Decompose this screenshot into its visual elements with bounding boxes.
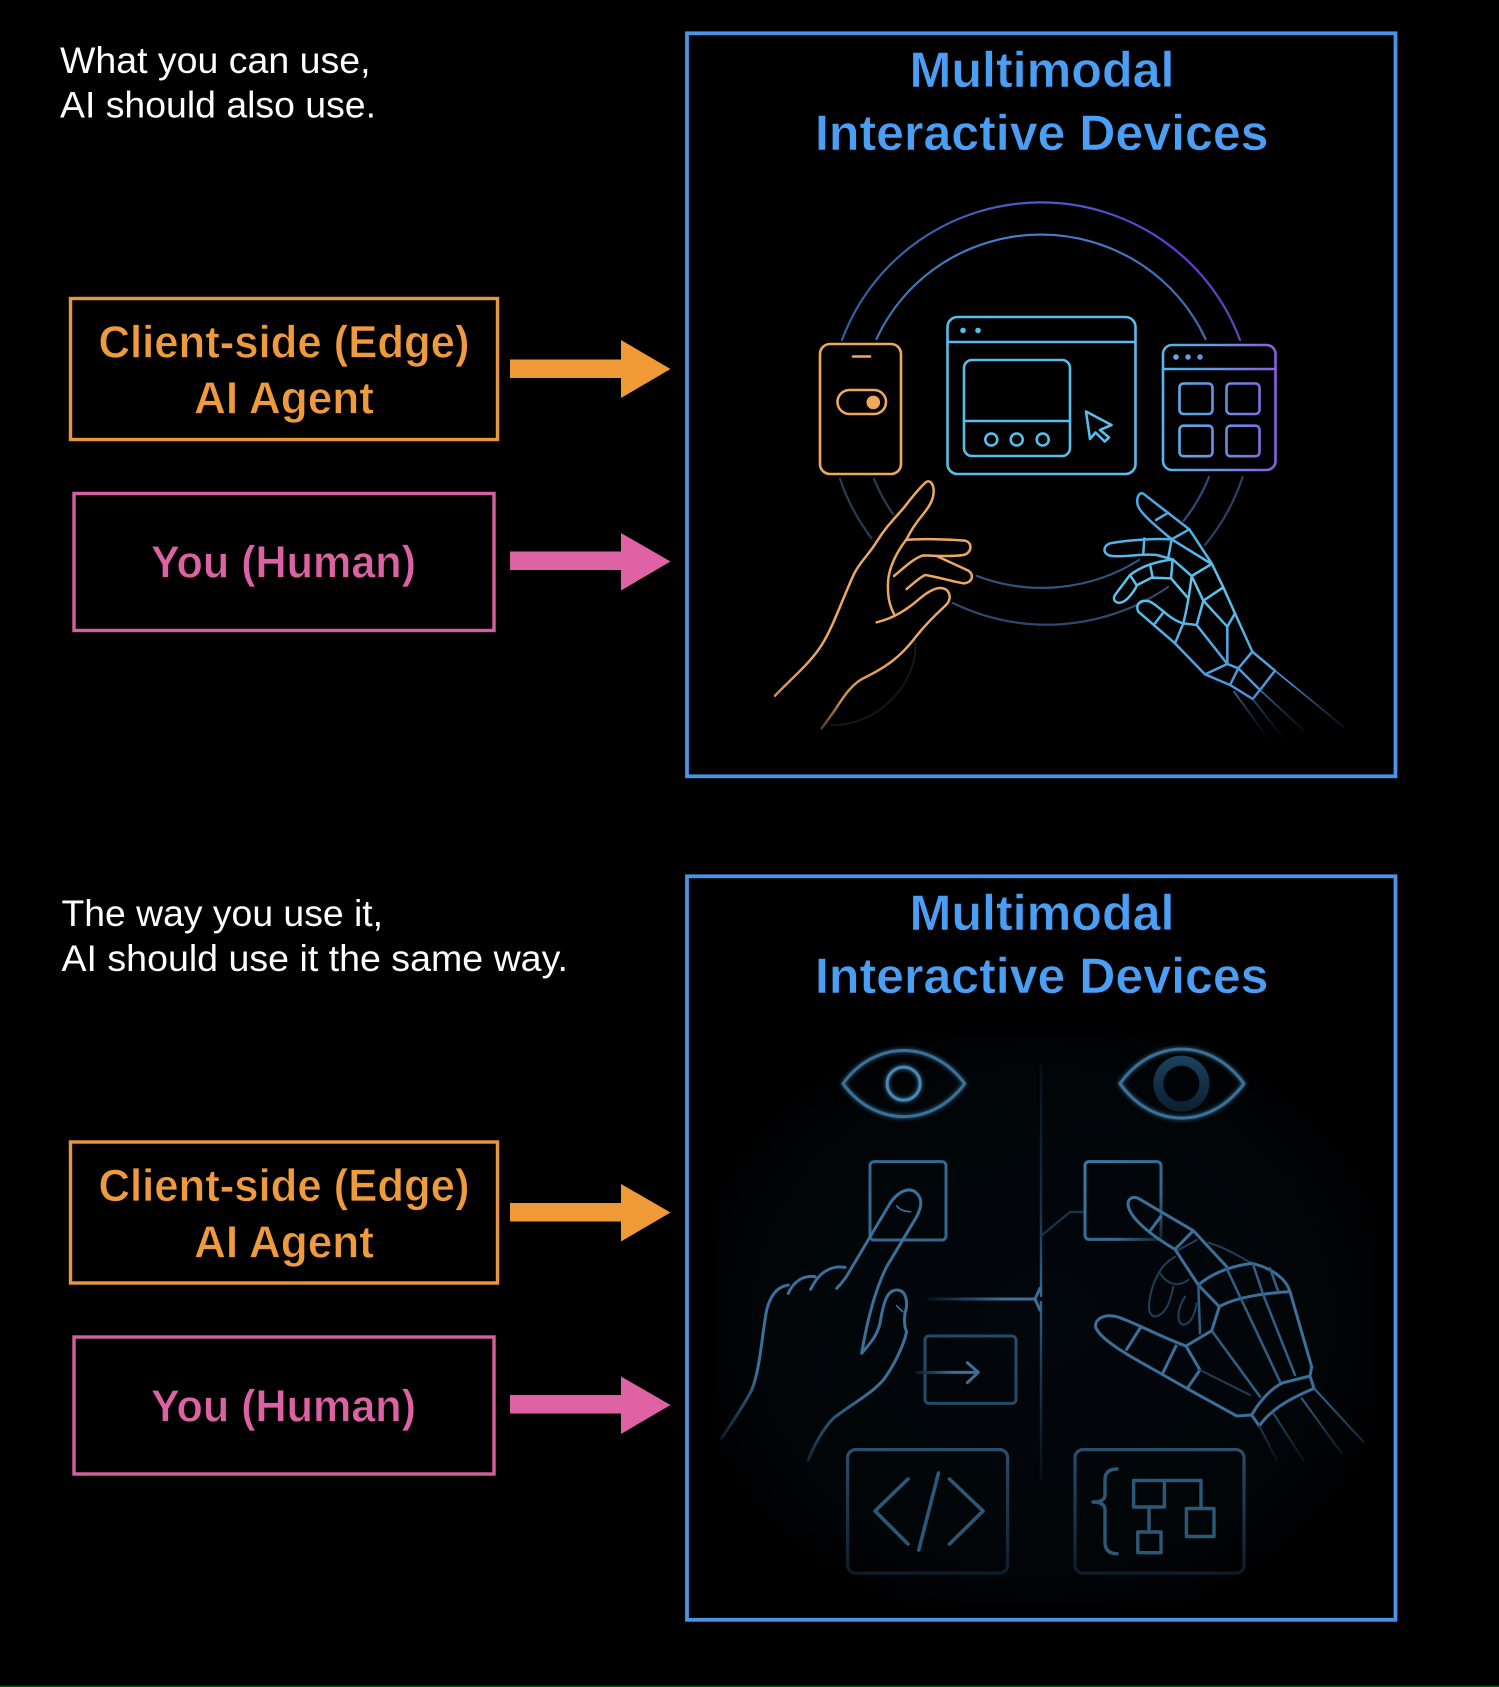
intro text 2 — [62, 893, 568, 979]
box: client-side AI agent: AI Agent — [194, 372, 374, 424]
icon: main window with cursor — [948, 317, 1136, 474]
icon: app grid window — [1163, 345, 1276, 470]
panel heading — [815, 41, 1268, 161]
arrow: agent to devices — [510, 340, 670, 398]
intro text 1: What you can use, — [60, 40, 370, 81]
illustration: robot finger pressing button — [1085, 1162, 1363, 1460]
box: client-side AI agent: Client-side (Edge) — [98, 316, 470, 368]
box: client-side AI agent: Client-side (Edge) — [98, 1160, 470, 1211]
intro text 1: AI should also use. — [60, 84, 376, 126]
illustration: human hand — [775, 481, 972, 728]
panel: devices top — [687, 33, 1396, 776]
arrow: human to devices — [510, 1376, 670, 1434]
panel heading — [815, 884, 1268, 1004]
section 2: the way you use it — [62, 876, 1396, 1620]
icon: human eye — [843, 1051, 965, 1117]
box: client-side AI agent — [70, 298, 498, 440]
arrow: agent to devices — [510, 1184, 670, 1242]
box: you human: You (Human) — [151, 536, 416, 588]
panel heading: Interactive Devices — [815, 947, 1268, 1004]
icon: phone with toggle — [820, 344, 901, 474]
box: you human — [74, 1337, 494, 1474]
icon: robot eye — [1120, 1049, 1244, 1118]
box: you human — [74, 494, 494, 630]
illustration: robot hand — [1105, 493, 1343, 738]
icon: structure diagram box — [1075, 1450, 1244, 1573]
panel heading: Multimodal — [910, 884, 1174, 941]
arrow: human to devices — [510, 533, 670, 590]
intro text 1 — [60, 40, 376, 126]
section 1: what you can use — [60, 33, 1396, 776]
panel heading: Multimodal — [910, 41, 1174, 98]
panel: devices bottom — [687, 876, 1396, 1620]
box: you human: You (Human) — [151, 1380, 416, 1432]
box: client-side AI agent: AI Agent — [194, 1216, 374, 1268]
box: client-side AI agent — [70, 1142, 498, 1283]
intro text 2: The way you use it, — [62, 893, 383, 934]
panel heading: Interactive Devices — [815, 104, 1268, 161]
intro text 2: AI should use it the same way. — [62, 938, 568, 979]
illustration: human finger pressing button — [722, 1162, 1040, 1460]
concentric rings — [840, 202, 1243, 625]
connector lines — [1041, 1066, 1084, 1480]
icon: code box — [848, 1450, 1008, 1573]
